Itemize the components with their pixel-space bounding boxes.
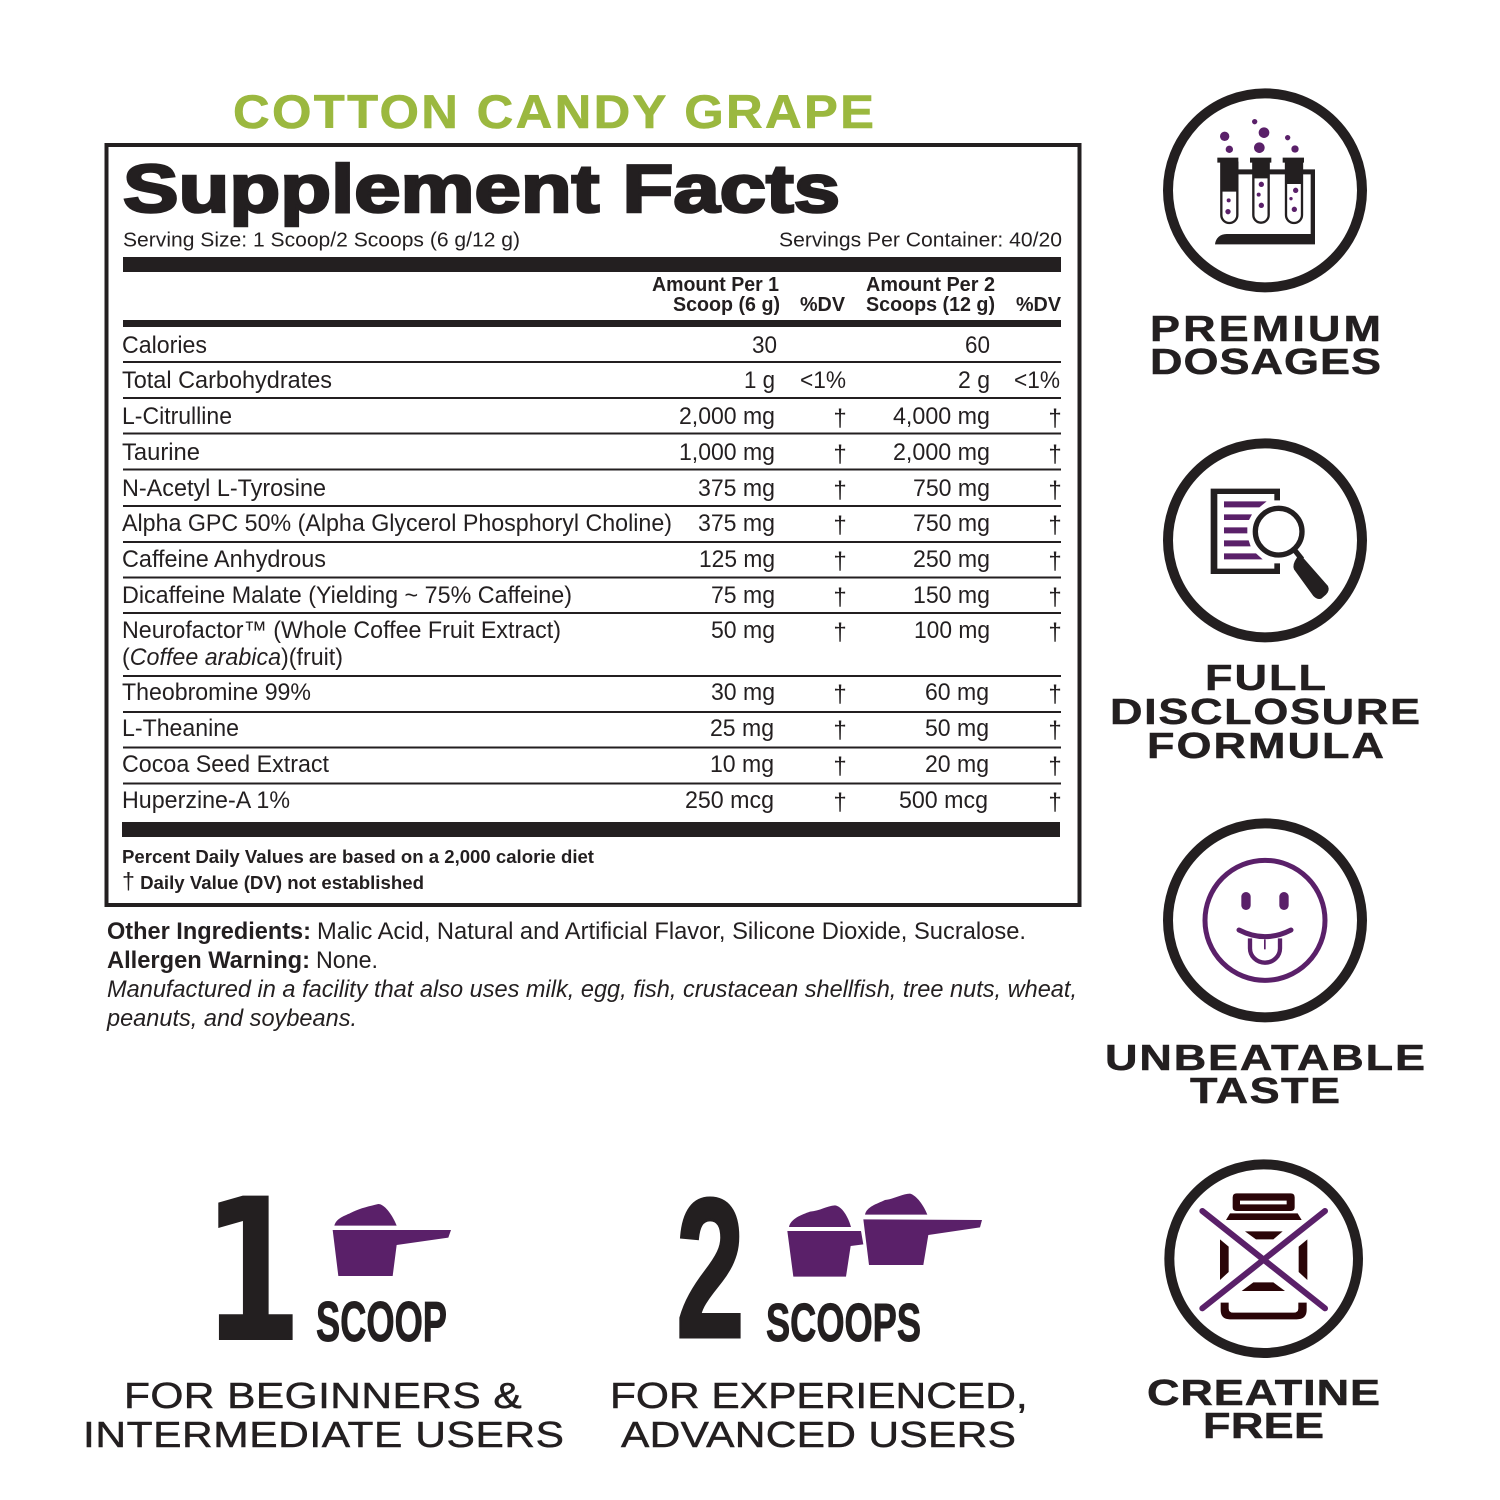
label: unbeatable taste: UNBEATABLE bbox=[1105, 1037, 1425, 1078]
row: theobromine: † bbox=[833, 681, 847, 708]
row: taurine: 1,000 mg bbox=[679, 439, 775, 466]
row: l-citrulline: † bbox=[1048, 405, 1062, 432]
row: neurofactor: Neurofactor™ (Whole Coffee Fruit Extract) bbox=[122, 617, 561, 644]
label: unbeatable taste: TASTE bbox=[1190, 1070, 1340, 1111]
row: huperzine-a: 250 mcg bbox=[685, 787, 774, 814]
row: caffeine anhydrous: † bbox=[833, 548, 847, 575]
numeral 1: 1 bbox=[202, 1156, 303, 1387]
row: neurofactor: 50 mg bbox=[711, 617, 775, 644]
icon: document with magnifier bbox=[1168, 443, 1362, 637]
row: caffeine anhydrous: 250 mg bbox=[913, 546, 990, 573]
caption: experienced bbox=[610, 1376, 1028, 1455]
row: cocoa seed extract: † bbox=[1048, 753, 1062, 780]
row: huperzine-a: † bbox=[833, 789, 847, 816]
caption: beginners: INTERMEDIATE USERS bbox=[83, 1415, 564, 1455]
label: full disclosure formula: FORMULA bbox=[1147, 725, 1384, 766]
column headers: Scoops (12 g) bbox=[866, 294, 995, 316]
row: dicaffeine malate: † bbox=[833, 584, 847, 611]
row: neurofactor bbox=[122, 617, 1062, 671]
row: l-theanine: 25 mg bbox=[710, 715, 774, 742]
column headers: Amount Per 2 bbox=[866, 274, 995, 296]
row: alpha gpc: 750 mg bbox=[913, 510, 990, 537]
row: l-citrulline: L-Citrulline bbox=[122, 403, 232, 430]
icon: crossed-out jar bbox=[1169, 1164, 1358, 1353]
row: taurine bbox=[122, 439, 1062, 468]
row: huperzine-a bbox=[122, 787, 1062, 816]
row: dicaffeine malate bbox=[122, 582, 1062, 611]
flavor title: COTTON CANDY GRAPE bbox=[233, 87, 874, 139]
label: premium dosages: DOSAGES bbox=[1150, 341, 1381, 382]
row: taurine: 2,000 mg bbox=[893, 439, 990, 466]
row: n-acetyl l-tyrosine: 750 mg bbox=[913, 475, 990, 502]
row: l-theanine: L-Theanine bbox=[122, 715, 239, 742]
row: theobromine bbox=[122, 679, 1062, 708]
other ingredients text block: Allergen Warning: bbox=[107, 947, 310, 974]
row: taurine: Taurine bbox=[122, 439, 200, 466]
row: neurofactor: 100 mg bbox=[914, 617, 990, 644]
other ingredients text block: Manufactured in a facility that also uses milk, egg, fish, crustacean shellfish, tree nuts, wheat, bbox=[107, 976, 1077, 1003]
row: l-citrulline: 4,000 mg bbox=[893, 403, 990, 430]
row: theobromine: 30 mg bbox=[711, 679, 775, 706]
heading: supplement facts: Supplement Facts bbox=[123, 151, 840, 227]
icon: smiley with tongue bbox=[1168, 823, 1362, 1017]
row: alpha gpc: 375 mg bbox=[698, 510, 775, 537]
row: dicaffeine malate: † bbox=[1048, 584, 1062, 611]
row: dicaffeine malate: 75 mg bbox=[711, 582, 775, 609]
row: total carbohydrates: <1% bbox=[800, 367, 846, 394]
caption: experienced: FOR EXPERIENCED, bbox=[610, 1376, 1028, 1416]
row: huperzine-a: † bbox=[1048, 789, 1062, 816]
text: scoops: SCOOPS bbox=[766, 1293, 921, 1353]
row: theobromine: 60 mg bbox=[925, 679, 989, 706]
row: theobromine: † bbox=[1048, 681, 1062, 708]
serving info: Servings Per Container: 40/20 bbox=[779, 230, 1062, 252]
row: n-acetyl l-tyrosine bbox=[122, 475, 1062, 504]
row: calories: 30 bbox=[752, 332, 777, 359]
caption: beginners bbox=[83, 1376, 564, 1455]
row: l-citrulline: † bbox=[833, 405, 847, 432]
row: neurofactor: † bbox=[1048, 619, 1062, 646]
other ingredients text block: None. bbox=[316, 947, 378, 974]
row: l-theanine: † bbox=[833, 717, 847, 744]
row: cocoa seed extract bbox=[122, 751, 1062, 780]
row: n-acetyl l-tyrosine: † bbox=[833, 477, 847, 504]
row: cocoa seed extract: Cocoa Seed Extract bbox=[122, 751, 329, 778]
one scoop graphic bbox=[202, 1156, 451, 1387]
other ingredients text block: Malic Acid, Natural and Artificial Flavor, Silicone Dioxide, Sucralose. bbox=[317, 918, 1026, 945]
row: l-theanine: † bbox=[1048, 717, 1062, 744]
row: dicaffeine malate: 150 mg bbox=[913, 582, 990, 609]
row: theobromine: Theobromine 99% bbox=[122, 679, 311, 706]
row: huperzine-a: Huperzine-A 1% bbox=[122, 787, 290, 814]
row: l-citrulline: 2,000 mg bbox=[679, 403, 775, 430]
caption: beginners: FOR BEGINNERS & bbox=[124, 1376, 522, 1416]
icon: two scoops bbox=[787, 1194, 982, 1277]
row: taurine: † bbox=[833, 441, 847, 468]
row: cocoa seed extract: † bbox=[833, 753, 847, 780]
row: total carbohydrates: Total Carbohydrates bbox=[122, 367, 332, 394]
row: total carbohydrates: <1% bbox=[1014, 367, 1060, 394]
serving info: Serving Size: 1 Scoop/2 Scoops (6 g/12 g) bbox=[123, 230, 520, 252]
row: caffeine anhydrous: † bbox=[1048, 548, 1062, 575]
icon: test tubes bbox=[1168, 93, 1362, 287]
icon: scoop bbox=[333, 1204, 451, 1276]
row: n-acetyl l-tyrosine: N-Acetyl L-Tyrosine bbox=[122, 475, 326, 502]
row: calories bbox=[122, 332, 990, 359]
row: caffeine anhydrous: 125 mg bbox=[699, 546, 775, 573]
row: n-acetyl l-tyrosine: 375 mg bbox=[698, 475, 775, 502]
other ingredients text block: Other Ingredients: bbox=[107, 918, 311, 945]
row: alpha gpc: Alpha GPC 50% (Alpha Glycerol Phosphoryl Choline) bbox=[122, 510, 672, 537]
footnotes: † Daily Value (DV) not established bbox=[122, 868, 424, 894]
label: full disclosure formula: FULL bbox=[1205, 657, 1326, 698]
other ingredients text block bbox=[106, 918, 1077, 1032]
row: l-citrulline bbox=[122, 403, 1062, 432]
row: calories: Calories bbox=[122, 332, 207, 359]
row: huperzine-a: 500 mcg bbox=[899, 787, 988, 814]
column headers: Amount Per 1 bbox=[652, 274, 779, 296]
label: creatine free: CREATINE bbox=[1147, 1372, 1380, 1413]
row: l-theanine bbox=[122, 715, 1062, 744]
row: calories: 60 bbox=[965, 332, 990, 359]
label: full disclosure formula bbox=[1110, 657, 1420, 766]
row: cocoa seed extract: 20 mg bbox=[925, 751, 989, 778]
row: caffeine anhydrous bbox=[122, 546, 1062, 575]
column headers: Scoop (6 g) bbox=[673, 294, 780, 316]
column headers bbox=[652, 274, 1062, 316]
label: creatine free bbox=[1147, 1372, 1380, 1446]
row: dicaffeine malate: Dicaffeine Malate (Yielding ~ 75% Caffeine) bbox=[122, 582, 572, 609]
row: alpha gpc bbox=[122, 510, 1062, 539]
row: alpha gpc: † bbox=[1048, 512, 1062, 539]
numeral 2: 2 bbox=[676, 1158, 745, 1380]
row: neurofactor: † bbox=[833, 619, 847, 646]
footnotes: Percent Daily Values are based on a 2,000 calorie diet bbox=[122, 846, 594, 867]
column headers: %DV bbox=[800, 294, 846, 316]
row: n-acetyl l-tyrosine: † bbox=[1048, 477, 1062, 504]
label: premium dosages bbox=[1150, 308, 1381, 382]
text: scoop: SCOOP bbox=[316, 1290, 447, 1354]
panel: supplement facts bbox=[106, 145, 1080, 905]
row: alpha gpc: † bbox=[833, 512, 847, 539]
column headers: %DV bbox=[1016, 294, 1062, 316]
caption: experienced: ADVANCED USERS bbox=[621, 1415, 1016, 1455]
row: total carbohydrates: 2 g bbox=[958, 367, 990, 394]
row: neurofactor: (Coffee arabica)(fruit) bbox=[122, 644, 343, 671]
two scoops graphic bbox=[676, 1158, 982, 1380]
serving info bbox=[123, 230, 1062, 252]
row: caffeine anhydrous: Caffeine Anhydrous bbox=[122, 546, 326, 573]
label: creatine free: FREE bbox=[1203, 1405, 1324, 1446]
row: total carbohydrates: 1 g bbox=[744, 367, 775, 394]
row: cocoa seed extract: 10 mg bbox=[710, 751, 774, 778]
row: taurine: † bbox=[1048, 441, 1062, 468]
footnotes bbox=[122, 846, 594, 894]
label: full disclosure formula: DISCLOSURE bbox=[1110, 691, 1420, 732]
row: total carbohydrates bbox=[122, 367, 1060, 394]
label: unbeatable taste bbox=[1105, 1037, 1425, 1111]
other ingredients text block: peanuts, and soybeans. bbox=[106, 1005, 357, 1032]
row: l-theanine: 50 mg bbox=[925, 715, 989, 742]
label: premium dosages: PREMIUM bbox=[1150, 308, 1381, 349]
